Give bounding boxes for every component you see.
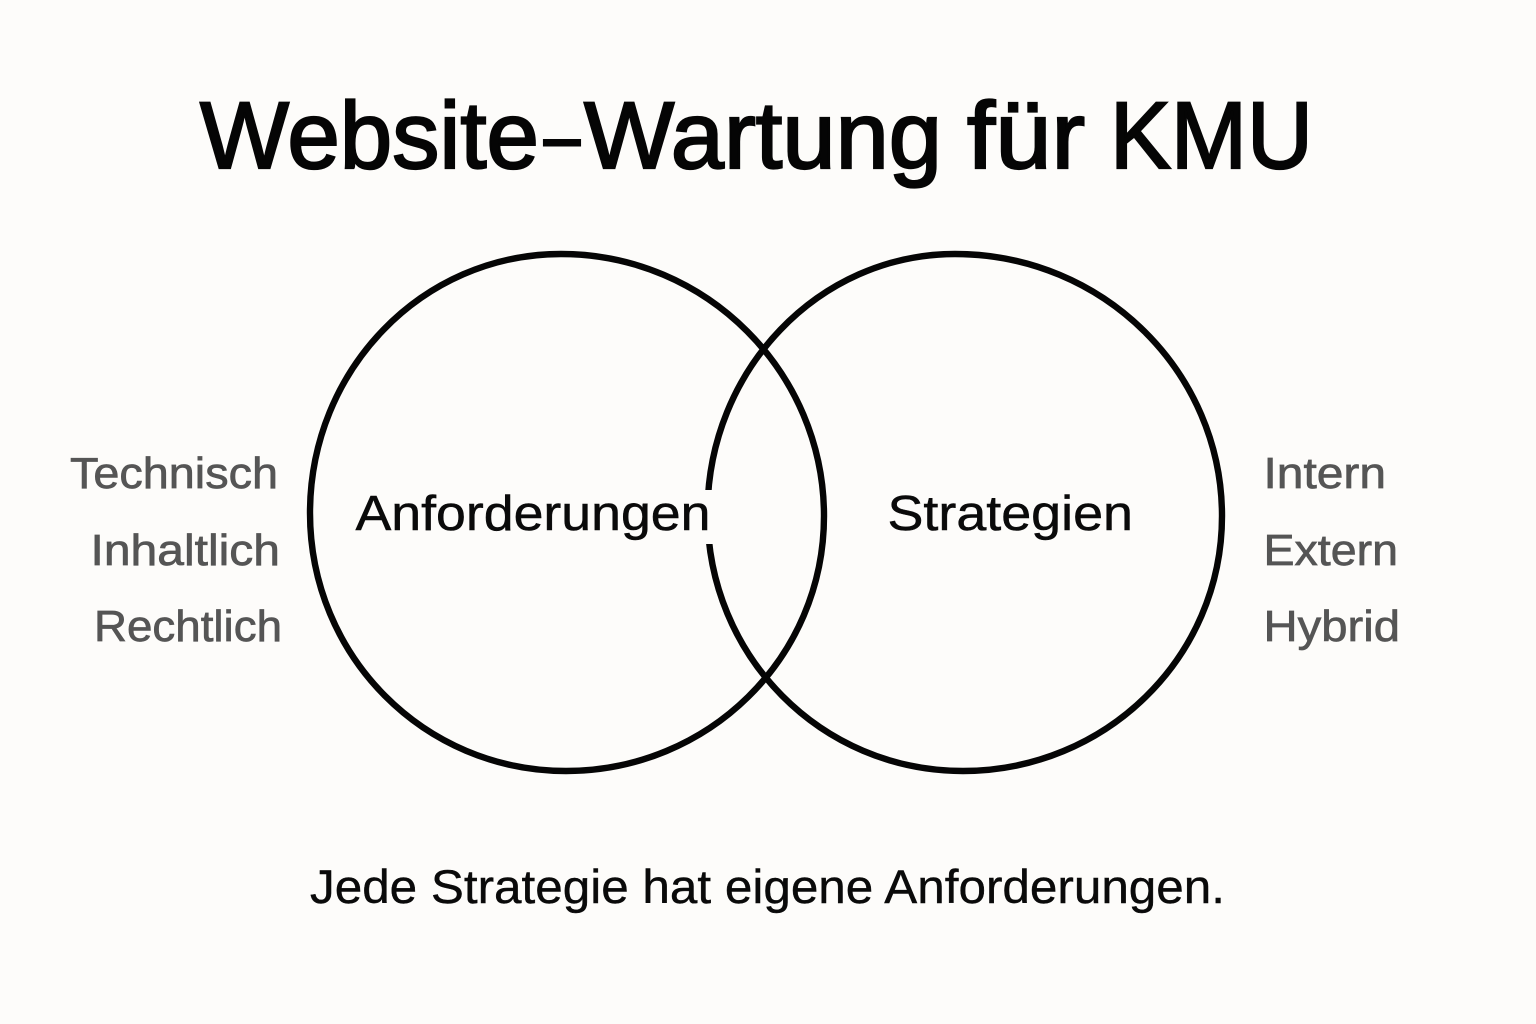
title: Website <box>200 83 539 189</box>
item: Hybrid: Hybrid <box>1264 602 1400 651</box>
left list: requirement types <box>70 449 282 651</box>
item: Technisch: Technisch <box>70 449 278 498</box>
venn diagram <box>310 254 1222 771</box>
circle: Strategien <box>708 254 1222 771</box>
title: - <box>536 83 588 189</box>
circle: Anforderungen <box>310 254 824 771</box>
title: KMU <box>1110 83 1313 189</box>
title: Wartung <box>584 83 942 189</box>
gap behind label <box>700 490 717 544</box>
caption: Jede Strategie hat eigene Anforderungen. <box>310 860 1225 913</box>
item: Extern: Extern <box>1264 526 1398 575</box>
label: Strategien: Strategien <box>888 487 1133 541</box>
title: für <box>967 83 1085 189</box>
item: Rechtlich: Rechtlich <box>94 602 282 651</box>
right list: strategy types <box>1264 449 1400 651</box>
item: Intern: Intern <box>1264 449 1386 498</box>
label: Anforderungen: Anforderungen <box>356 487 710 541</box>
item: Inhaltlich: Inhaltlich <box>90 526 280 575</box>
